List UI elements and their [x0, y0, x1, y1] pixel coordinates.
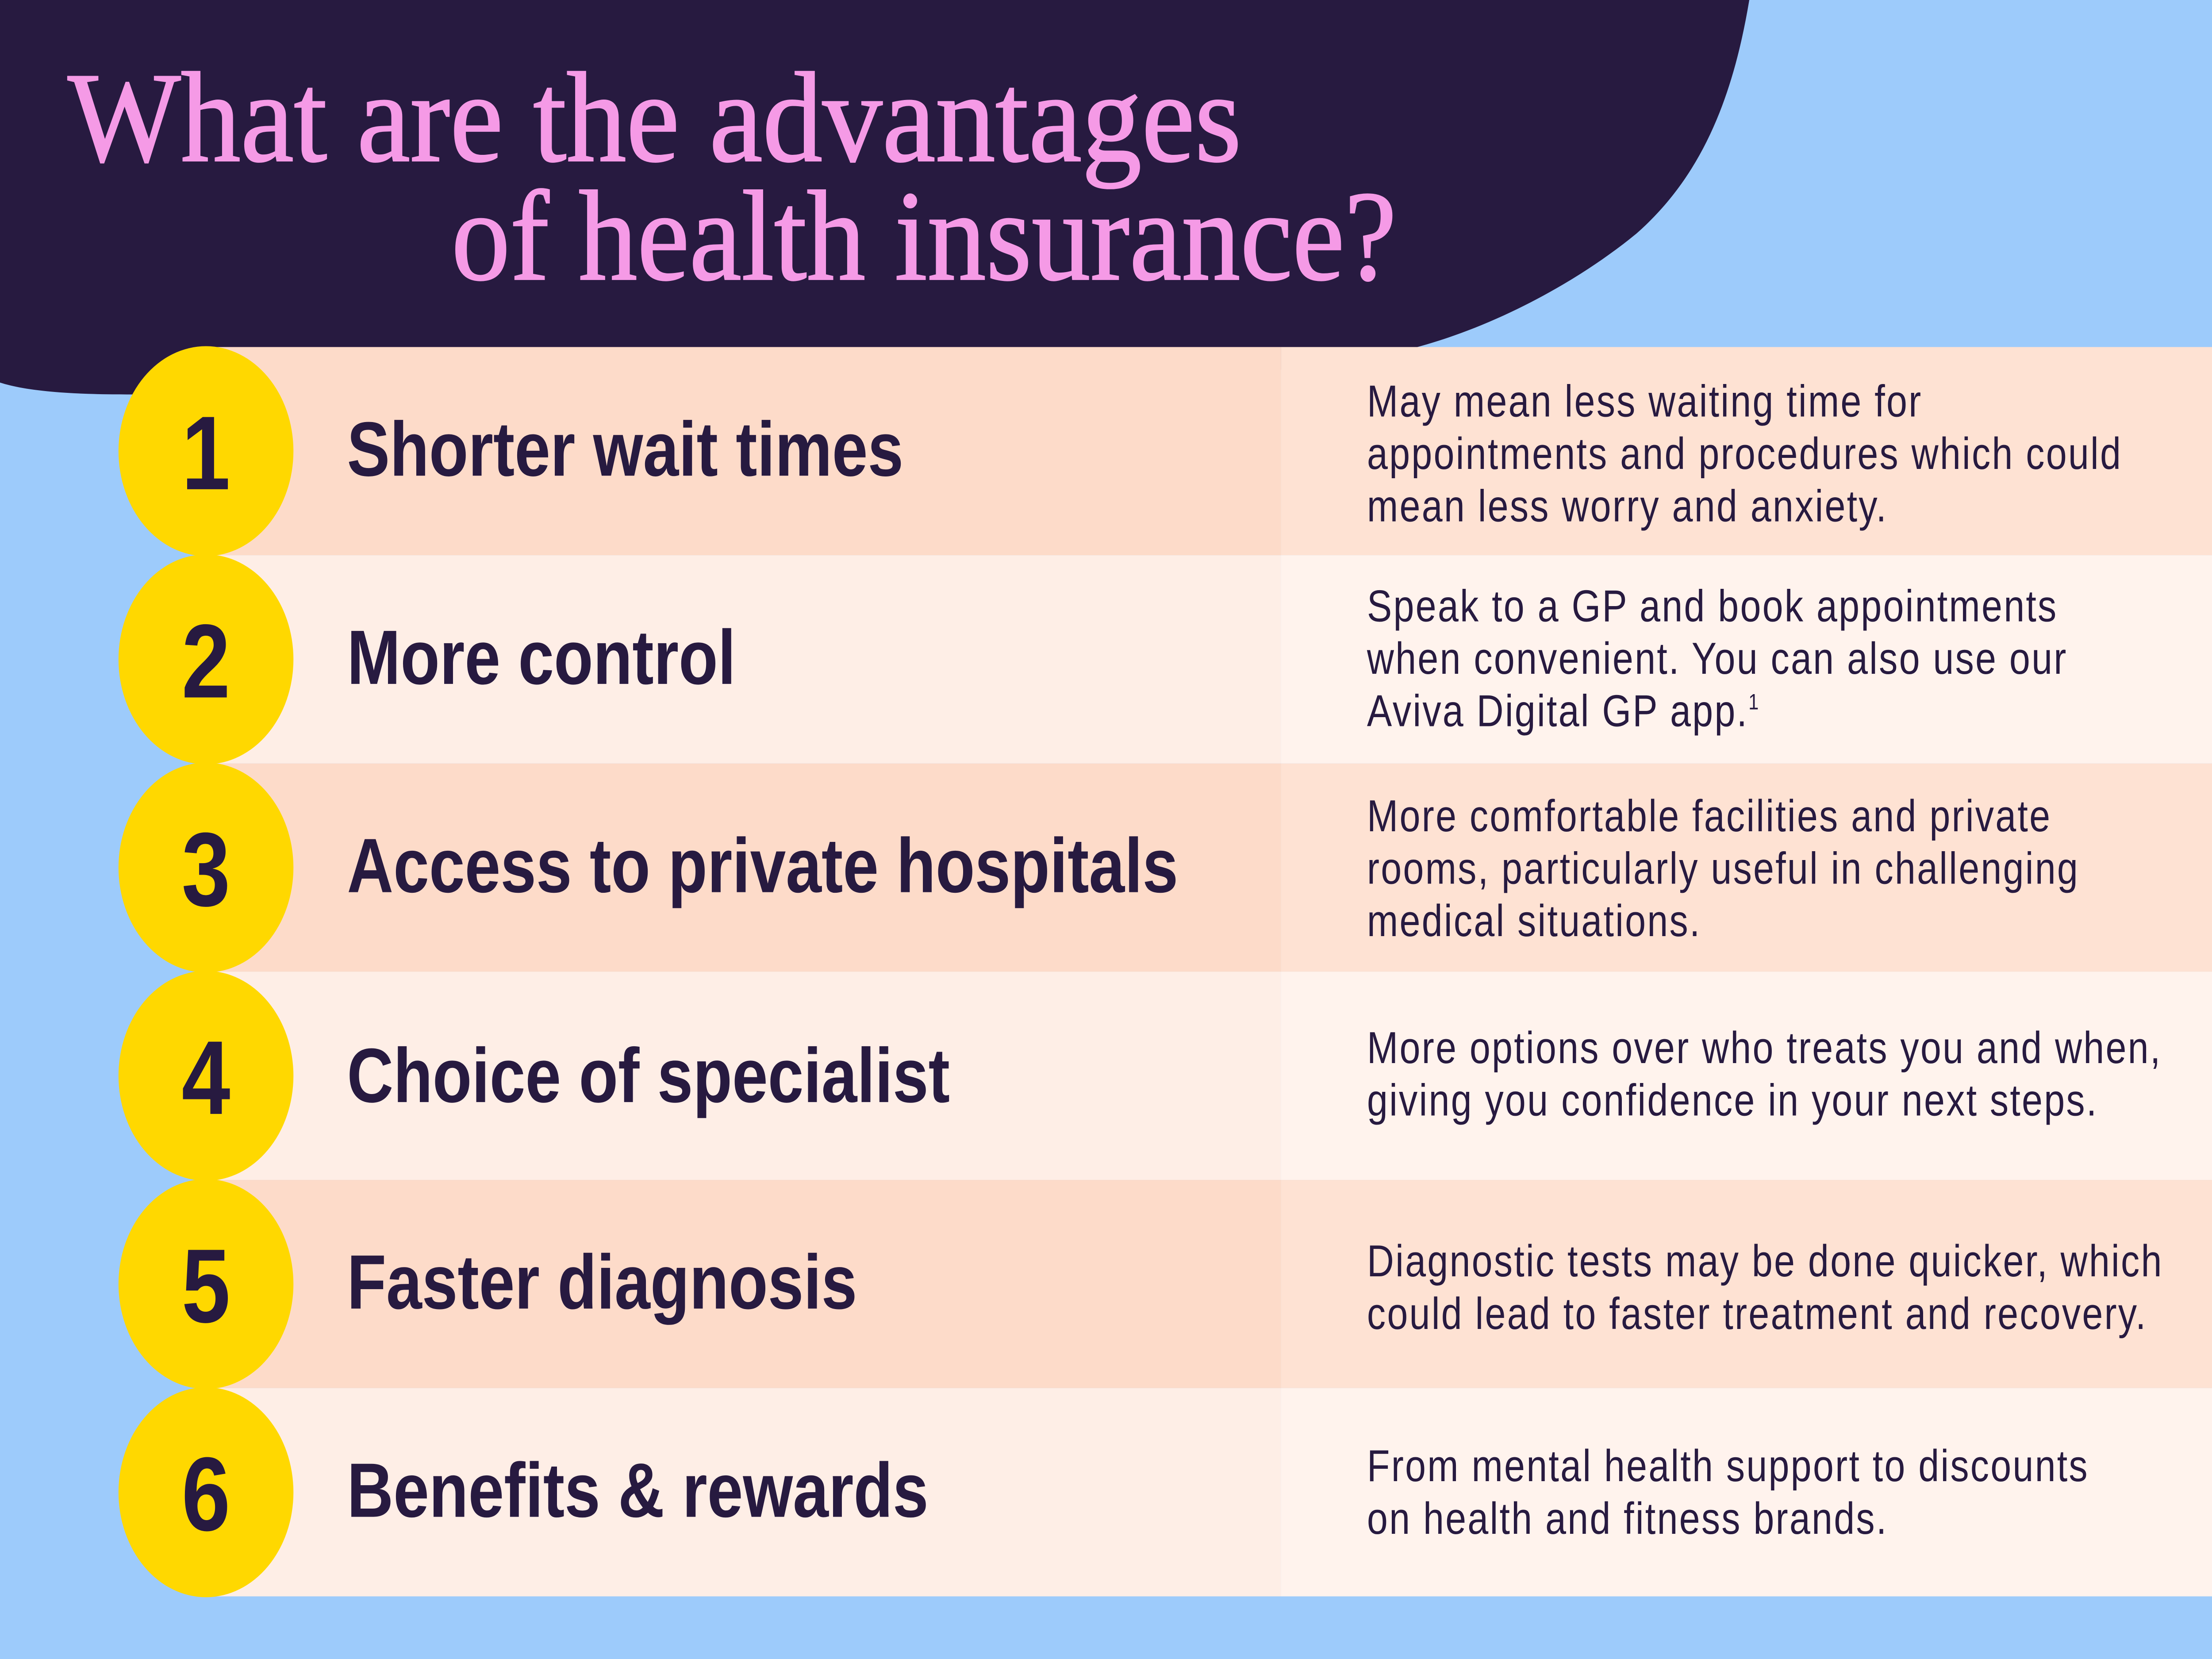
label 3: Access to private hospitals — [347, 822, 1178, 909]
title — [68, 46, 1397, 307]
label 4: Choice of specialist — [347, 1033, 950, 1118]
row 6 — [119, 1387, 2212, 1597]
description 3: rooms, particularly useful in challenging — [1367, 843, 2079, 893]
icon: number 6 — [119, 1387, 293, 1597]
label 2: More control — [347, 614, 736, 700]
description 4: giving you confidence in your next steps. — [1367, 1075, 2098, 1125]
icon: number 3: 3 — [182, 811, 230, 928]
icon: number 1: 1 — [182, 395, 230, 512]
icon: number 2: 2 — [182, 603, 230, 720]
description 4: More options over who treats you and when, — [1367, 1023, 2162, 1073]
title: What are the advantages — [68, 46, 1241, 189]
title: of health insurance? — [451, 165, 1397, 307]
icon: number 5: 5 — [182, 1227, 230, 1345]
label 1: Shorter wait times — [347, 406, 903, 492]
icon: number 4: 4 — [182, 1019, 230, 1137]
description 6: on health and fitness brands. — [1367, 1494, 1888, 1544]
row 5 — [119, 1179, 2212, 1389]
icon: number 6: 6 — [182, 1436, 230, 1553]
description 3: medical situations. — [1367, 896, 1701, 946]
row 4 — [119, 971, 2212, 1181]
icon: number 4 — [119, 971, 293, 1181]
label 6: Benefits & rewards — [347, 1447, 929, 1533]
description 2: when convenient. You can also use our — [1367, 634, 2068, 684]
row 2 — [119, 554, 2212, 764]
icon: number 3 — [119, 763, 293, 972]
label 5: Faster diagnosis — [347, 1239, 857, 1325]
description 1: appointments and procedures which could — [1367, 429, 2122, 479]
description 1: May mean less waiting time for — [1367, 376, 1922, 426]
description 3: More comfortable facilities and private — [1367, 791, 2051, 841]
description 5: Diagnostic tests may be done quicker, which — [1367, 1236, 2163, 1286]
description 2: Aviva Digital GP app. — [1367, 686, 1748, 736]
icon: number 5 — [119, 1179, 293, 1389]
row 3 — [119, 763, 2212, 972]
description 1: mean less worry and anxiety. — [1367, 481, 1888, 531]
description 2: Speak to a GP and book appointments — [1367, 581, 2058, 631]
description 5: could lead to faster treatment and recovery. — [1367, 1289, 2147, 1339]
description 6: From mental health support to discounts — [1367, 1441, 2089, 1491]
icon: number 1 — [119, 346, 293, 556]
icon: number 2 — [119, 554, 293, 764]
header background shape — [0, 0, 1749, 395]
row 1 — [119, 346, 2212, 556]
description 2: 1 — [1748, 690, 1760, 714]
